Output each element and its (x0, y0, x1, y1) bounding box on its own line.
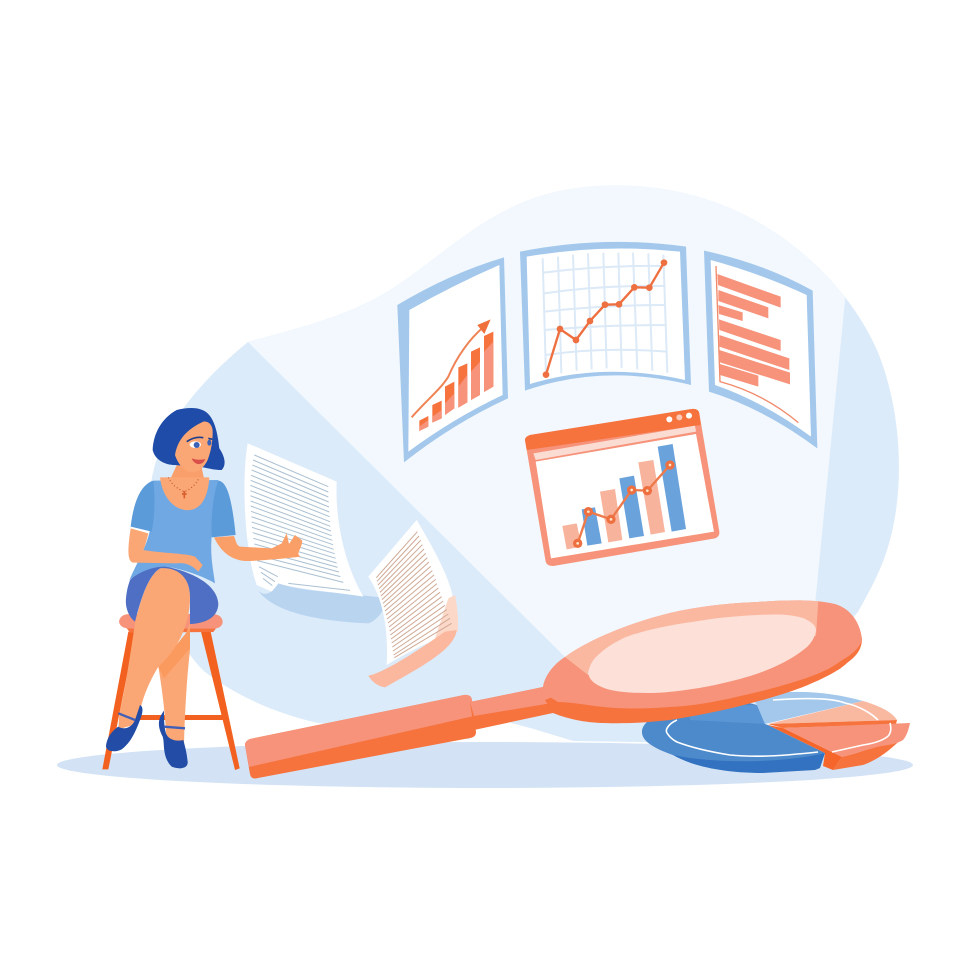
eyebrow (187, 437, 212, 442)
pie wedge slice (768, 723, 910, 770)
floor shadow (57, 742, 913, 788)
document: orange sheet (368, 520, 458, 687)
pie dark blue segment (642, 698, 825, 761)
falling document pages (244, 443, 458, 687)
magnifier handle grip (245, 695, 476, 778)
chart panels group (397, 242, 817, 566)
hair (153, 408, 225, 470)
back leg shade (158, 628, 190, 678)
eye (190, 441, 201, 448)
stool (102, 614, 240, 770)
neck (168, 462, 205, 483)
magnifier ring highlight (565, 600, 818, 675)
front leg (118, 568, 190, 729)
neckline (160, 477, 209, 510)
document: blue sheet (244, 443, 388, 623)
pie light blue segment (752, 692, 863, 724)
panel: browser window chart (525, 409, 719, 566)
illustration canvas (57, 185, 913, 788)
right arm and hand (214, 533, 302, 561)
left arm (128, 528, 203, 572)
pie peach segment (768, 701, 897, 724)
dress (129, 480, 218, 583)
pie white ring (666, 698, 878, 756)
pie centre line (768, 720, 897, 728)
pie chart (642, 692, 910, 773)
head (153, 408, 225, 472)
pie side (642, 730, 825, 773)
panel: line chart on grid (520, 242, 691, 391)
panel: rising bar chart (397, 257, 508, 462)
woman on stool (102, 408, 302, 770)
skirt (126, 566, 218, 624)
white gap under handle (470, 712, 573, 742)
magnifier lens (588, 614, 816, 693)
panel: horizontal bar chart (704, 251, 817, 448)
back leg (158, 623, 190, 743)
necklace (168, 477, 199, 498)
magnifying glass (245, 600, 862, 778)
magnifier neck (470, 687, 558, 730)
sleeves (131, 481, 236, 537)
magnifier ring top (543, 600, 862, 708)
face (175, 422, 213, 472)
shoes (106, 705, 188, 768)
background blob (150, 185, 899, 743)
pie mid blue segment (690, 705, 765, 724)
light beam from magnifier (248, 186, 845, 657)
magnifier ring side (545, 638, 862, 723)
mouth (192, 458, 205, 464)
